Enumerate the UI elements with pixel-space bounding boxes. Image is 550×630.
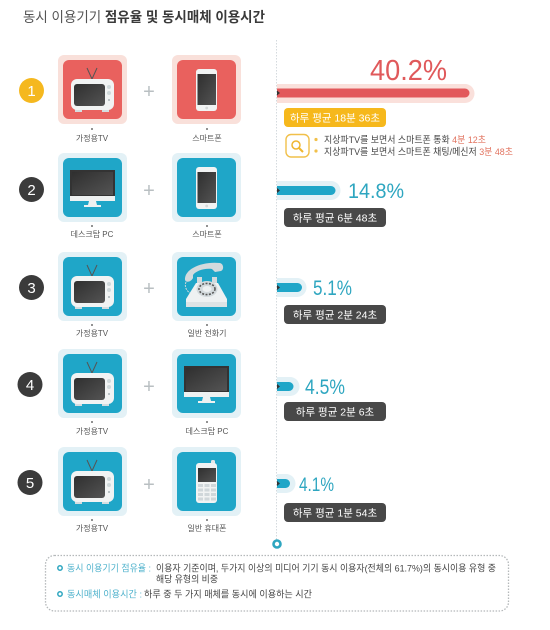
- plus sign: +: [143, 474, 155, 496]
- icon: landline telephone on blue tile: [172, 252, 241, 321]
- device label: desktop: [186, 421, 229, 436]
- value: 40.2%: 40.2%: [370, 55, 447, 87]
- device label: mobile: [187, 519, 227, 533]
- rank 4 row: [18, 349, 241, 436]
- callout: detail times: 지상파TV를 보면서 스마트폰 통화 4분 12초: [324, 135, 486, 146]
- rank badge 4: [18, 372, 42, 397]
- icon: smartphone on red tile: [172, 55, 241, 124]
- rank badge 1: [19, 78, 44, 103]
- pill: daily average 2m 24s: 하루 평균 2분 24초: [293, 308, 377, 322]
- pill: daily average 2m 24s: [284, 305, 386, 324]
- rank 5 row: [18, 447, 241, 533]
- plus sign: +: [143, 81, 155, 103]
- device label: TV: [76, 128, 109, 143]
- pill: daily average 2m 6s: [284, 402, 386, 421]
- pill: daily average 2m 6s: 하루 평균 2분 6초: [296, 406, 375, 418]
- bar: 5.1%: [277, 278, 307, 297]
- device label: landline: [187, 324, 227, 338]
- rank badge 2: [19, 177, 44, 202]
- footnote: share definition: [58, 562, 496, 586]
- device label: smartphone: [192, 128, 222, 143]
- device label: landline: 일반 전화기: [187, 328, 227, 338]
- icon: smartphone on blue tile: [172, 153, 241, 222]
- device label: desktop: 데스크탑 PC: [71, 230, 114, 239]
- device label: TV: [76, 519, 109, 533]
- value: 14.8%: 14.8%: [348, 180, 404, 203]
- device label: smartphone: 스마트폰: [192, 230, 222, 239]
- device label: TV: 가정용TV: [76, 523, 109, 533]
- rank badge 2: 2: [27, 182, 36, 199]
- bar: 14.8%: [277, 181, 340, 200]
- device label: mobile: 일반 휴대폰: [187, 524, 227, 533]
- footnote: time definition: [58, 588, 312, 600]
- footnote: share definition: 동시 이용기기 점유율 :: [67, 562, 151, 574]
- footnote: time definition: 동시매체 이용시간 :: [67, 590, 142, 600]
- device label: TV: [76, 324, 109, 338]
- footnote: share definition: 해당 유형의 비중: [156, 574, 218, 586]
- plus sign: +: [143, 180, 155, 202]
- rank badge 5: [18, 470, 42, 495]
- callout: detail times: 지상파TV를 보면서 스마트폰 채팅/메신저 3분 48초: [324, 147, 513, 158]
- pill: daily average 18m 36s: [284, 108, 386, 127]
- device label: desktop: 데스크탑 PC: [186, 427, 229, 436]
- rank 2 row: [19, 153, 241, 239]
- footnote: time definition: 하루 중 두 가지 매체를 동시에 이용하는 시간: [144, 588, 312, 600]
- bar: 4.1%: [277, 474, 296, 493]
- icon: desktop on blue tile: [172, 349, 241, 418]
- device label: desktop: [71, 225, 114, 239]
- footnote panel: [46, 556, 508, 611]
- device label: smartphone: [192, 225, 222, 239]
- plus sign: +: [143, 376, 155, 398]
- pill: daily average 6m 48s: 하루 평균 6분 48초: [293, 212, 377, 224]
- device label: smartphone: 스마트폰: [192, 134, 222, 143]
- pill: daily average 1m 54s: 하루 평균 1분 54초: [293, 506, 377, 520]
- pill: daily average 6m 48s: [284, 208, 386, 227]
- pill: daily average 18m 36s: 하루 평균 18분 36초: [290, 112, 380, 124]
- title: 동시 이용기기 점유율 및 동시매체 이용시간: [23, 9, 265, 25]
- icon: TV on red tile: [58, 55, 127, 124]
- timeline end marker: [274, 540, 280, 548]
- icon: mobile handset on blue tile: [172, 447, 241, 516]
- icon: TV on blue tile: [58, 349, 127, 418]
- rank badge 3: [19, 275, 44, 300]
- icon: desktop on blue tile: [58, 153, 127, 222]
- pill: daily average 1m 54s: [284, 503, 386, 522]
- value: 5.1%: 5.1%: [313, 277, 352, 300]
- value: 4.5%: 4.5%: [305, 376, 345, 399]
- rank 1 row: [19, 55, 241, 143]
- bar: 4.5%: [277, 377, 300, 396]
- rank 3 row: [19, 252, 241, 338]
- rank badge 3: 3: [27, 280, 36, 297]
- bar: 40.2%: [277, 84, 474, 103]
- device label: TV: 가정용TV: [76, 328, 109, 338]
- rank badge 5: 5: [26, 475, 34, 492]
- icon: magnifier: [286, 134, 309, 157]
- device label: TV: [76, 421, 109, 436]
- rank badge 1: 1: [27, 83, 36, 100]
- device label: TV: 가정용TV: [76, 133, 109, 143]
- value: 4.1%: 4.1%: [299, 475, 334, 496]
- icon: TV on blue tile: [58, 252, 127, 321]
- rank badge 4: 4: [26, 377, 34, 394]
- footnote: share definition: 이용자 기준이며, 두가지 이상의 미디어 기기 동시 이용자(전체의 61.7%)의 동시이용 유형 중: [156, 564, 496, 574]
- device label: TV: 가정용TV: [76, 426, 109, 436]
- callout: detail times: [314, 135, 513, 158]
- plus sign: +: [143, 278, 155, 300]
- icon: TV on blue tile: [58, 447, 127, 516]
